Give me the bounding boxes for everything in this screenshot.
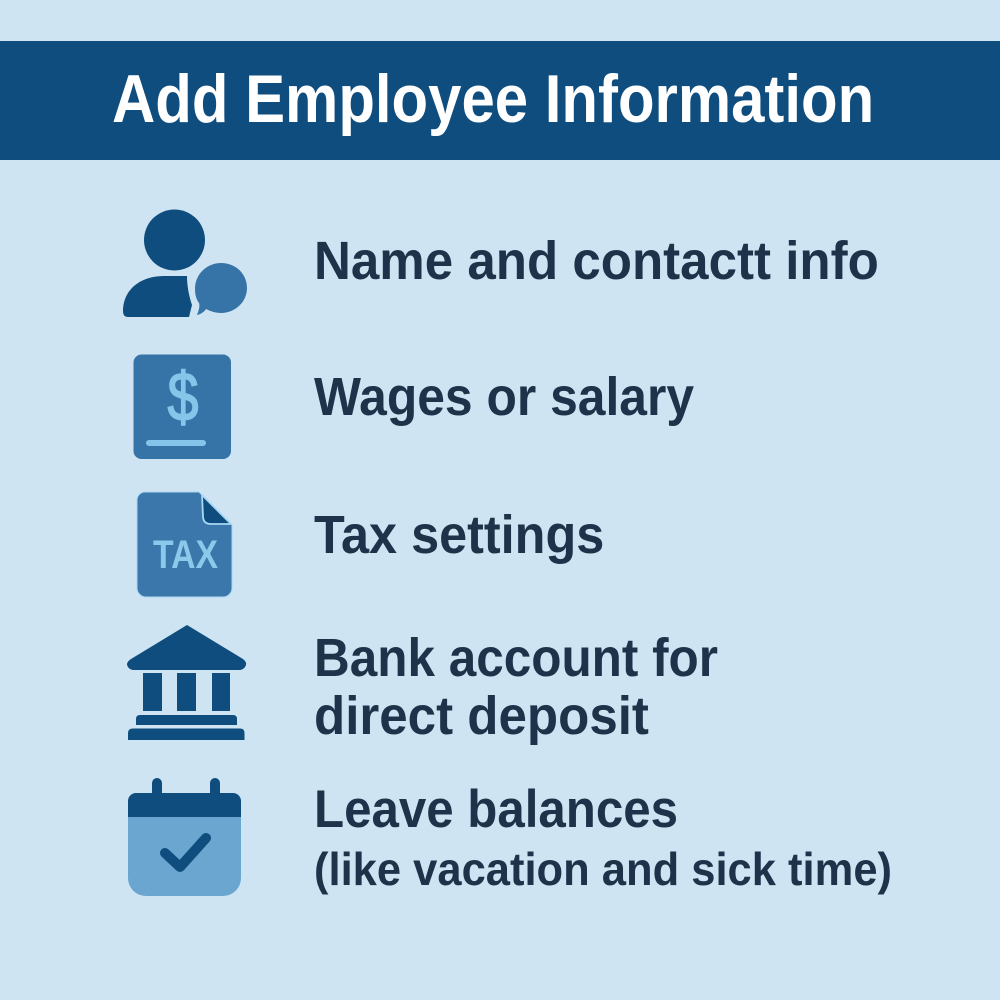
icon: dollar card: $ xyxy=(168,358,198,436)
icon: dollar card xyxy=(134,354,231,459)
title banner xyxy=(0,41,1000,160)
text: bank account xyxy=(314,628,718,746)
icon: calendar with check xyxy=(128,778,241,896)
text: bank account: direct deposit xyxy=(314,686,649,746)
icon: tax document: TAX xyxy=(153,533,218,577)
icon: tax document xyxy=(136,492,232,598)
text: bank account: Bank account for xyxy=(314,628,718,688)
text: name and contact: Name and contactt info xyxy=(314,231,879,291)
title: Add Employee Information xyxy=(112,61,874,137)
text: leave balances: Leave balances xyxy=(314,780,678,839)
icon: person with speech bubble xyxy=(123,210,247,317)
text: wages: Wages or salary xyxy=(314,367,694,427)
text: tax settings: Tax settings xyxy=(314,505,604,565)
text: leave balances detail: (like vacation and sick time) xyxy=(314,843,892,895)
icon: bank xyxy=(127,625,246,740)
